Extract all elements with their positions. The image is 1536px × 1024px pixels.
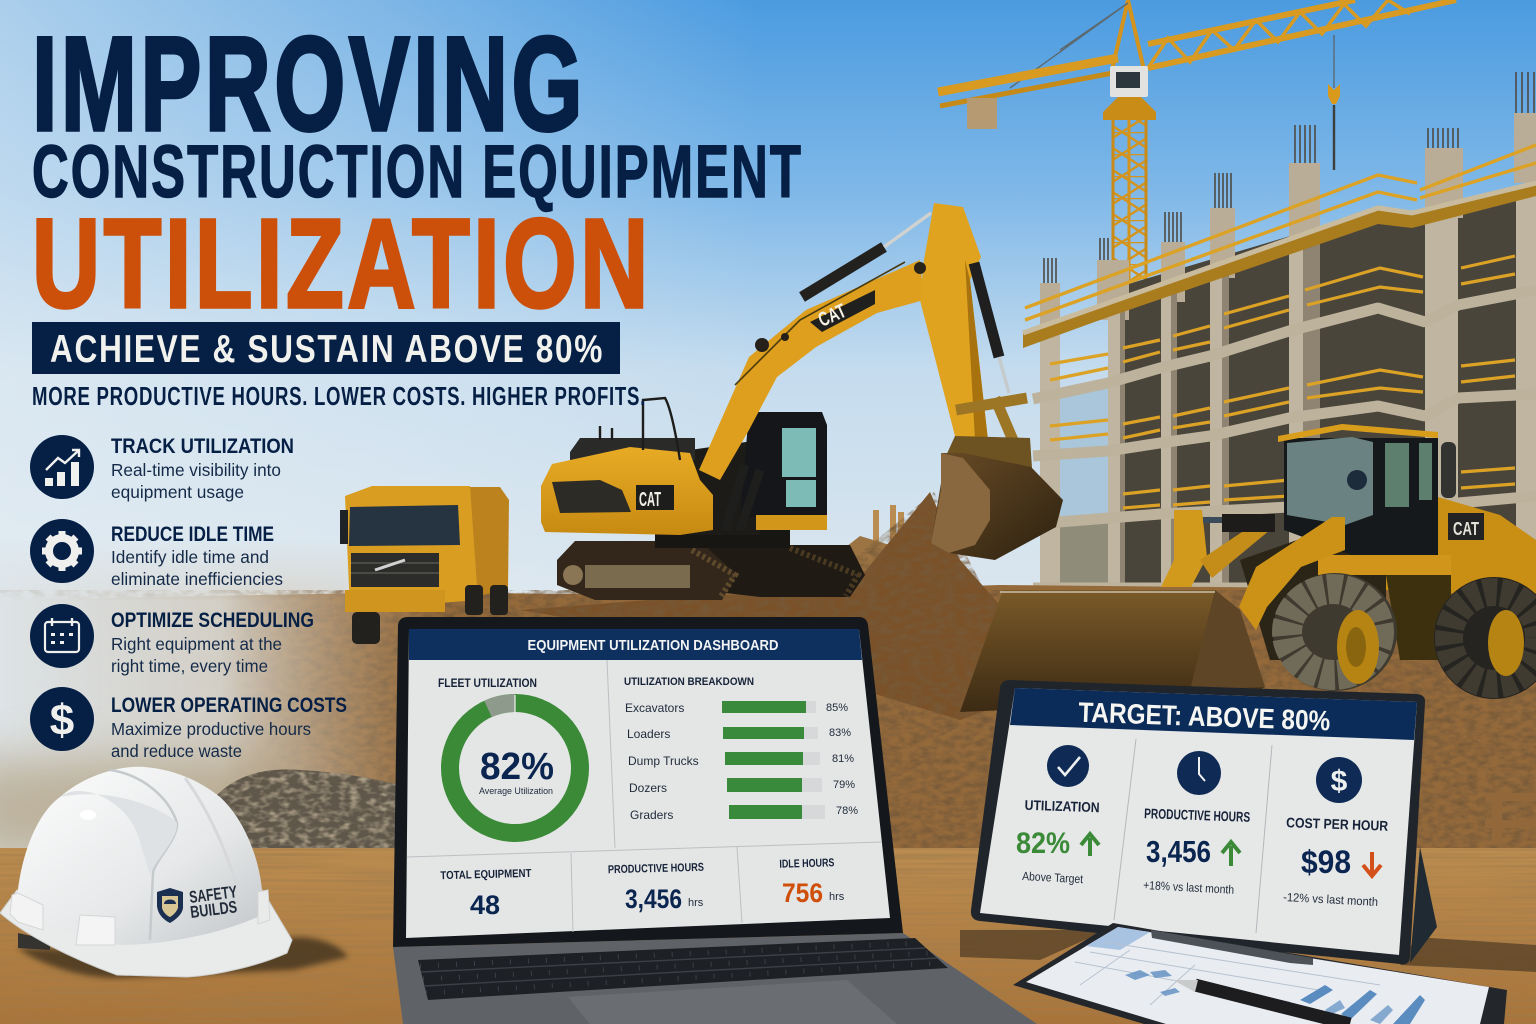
icon: dollar: $ <box>50 696 74 745</box>
wheel loader: CAT <box>1453 519 1479 539</box>
stat: idle hours: 756 <box>782 878 823 908</box>
metric: cost per hour: -12% vs last month <box>1283 890 1378 909</box>
benefit: lower operating costs: LOWER OPERATING COSTS <box>111 694 347 717</box>
tablet stand <box>1410 847 1437 963</box>
bar chart: utilization breakdown: 81% <box>832 753 854 765</box>
loader front wheel <box>1273 573 1397 691</box>
pen <box>1173 980 1350 1024</box>
icon: dollar: $ <box>1331 765 1348 798</box>
loader cab <box>1284 438 1438 560</box>
arrow: up <box>1222 842 1240 866</box>
excavator <box>541 203 1063 600</box>
tablet header: TARGET: ABOVE 80% <box>1078 697 1331 736</box>
title <box>32 10 803 334</box>
laptop screen <box>406 629 890 938</box>
wheel loader <box>960 424 1536 712</box>
report chart <box>1125 970 1425 1024</box>
bar chart: utilization breakdown: Dump Trucks <box>628 754 699 768</box>
stat: productive hours: PRODUCTIVE HOURS <box>608 862 704 876</box>
bar chart: utilization breakdown: Dozers <box>629 781 667 795</box>
dashboard header <box>409 629 862 660</box>
banner: achieve and sustain <box>32 322 620 374</box>
excavator stick <box>920 203 988 440</box>
benefit: lower operating costs: Maximize productive hours <box>111 719 311 739</box>
icon: bar chart <box>30 435 94 499</box>
metric: productive hours: PRODUCTIVE HOURS <box>1144 805 1250 825</box>
stat: productive hours <box>608 862 704 914</box>
hard hat brim <box>0 890 292 977</box>
loader chassis <box>1240 525 1386 660</box>
icon: check <box>1047 745 1089 787</box>
excavator tracks <box>557 541 865 600</box>
title line: construction equipment: CONSTRUCTION EQUIPMENT <box>32 130 803 213</box>
icon: gear <box>30 519 94 583</box>
dashboard header: EQUIPMENT UTILIZATION DASHBOARD <box>528 637 779 654</box>
sky background <box>0 0 1536 640</box>
metric: productive hours: 3,456 <box>1146 834 1211 869</box>
excavator bucket <box>931 453 1063 560</box>
top slab formwork <box>1023 145 1536 348</box>
icon: calendar <box>30 604 94 668</box>
excavator: CAT <box>639 489 661 511</box>
metric: cost per hour <box>1283 757 1388 909</box>
arrow: down <box>1363 852 1381 876</box>
wooden table <box>0 848 1536 1024</box>
hard hat logo: SAFETY <box>188 882 239 907</box>
excavator cab <box>740 412 827 517</box>
laptop base and keyboard <box>393 933 1037 1024</box>
loader bucket <box>960 590 1265 712</box>
benefit: optimize scheduling <box>30 604 314 676</box>
benefit: reduce idle time: eliminate inefficiencies <box>111 569 283 589</box>
excavator slew base <box>655 530 790 548</box>
icon: clock <box>1177 751 1221 795</box>
excavator counterweight and engine <box>570 438 695 460</box>
table shadows <box>17 930 1536 978</box>
metric: cost per hour: COST PER HOUR <box>1286 814 1388 834</box>
hard hat logo: BUILDS <box>189 897 238 922</box>
tower crane <box>938 0 1456 303</box>
benefit: reduce idle time: Identify idle time and <box>111 547 269 567</box>
donut chart: fleet utilization: 82% <box>480 746 554 788</box>
loader rear wheel <box>1434 577 1536 699</box>
stat: total equipment <box>440 868 532 920</box>
tablet screen <box>980 688 1417 955</box>
bar chart: utilization breakdown: 78% <box>836 805 858 817</box>
donut chart: fleet utilization: Average Utilization <box>479 786 553 797</box>
rebar <box>1044 72 1534 283</box>
metric: productive hours: +18% vs last month <box>1143 878 1234 897</box>
pallet <box>1485 793 1536 845</box>
metric: utilization <box>1016 745 1100 886</box>
distant site structures <box>873 505 904 545</box>
benefit: lower operating costs: and reduce waste <box>111 741 242 761</box>
tablet <box>971 680 1437 964</box>
benefit: track utilization <box>30 435 294 502</box>
benefit: optimize scheduling: Right equipment at the <box>111 634 282 654</box>
stat: productive hours: 3,456 <box>625 884 682 914</box>
bar chart: utilization breakdown: Excavators <box>625 701 684 715</box>
banner: achieve and sustain: ACHIEVE & SUSTAIN ABOVE 80% <box>50 328 604 371</box>
benefit: track utilization: equipment usage <box>111 482 244 502</box>
benefit: optimize scheduling: OPTIMIZE SCHEDULING <box>111 609 314 632</box>
benefit: track utilization: TRACK UTILIZATION <box>111 435 294 458</box>
donut chart: fleet utilization: FLEET UTILIZATION <box>438 678 537 690</box>
arrow: up <box>1081 834 1099 856</box>
stat: idle hours: hrs <box>829 891 845 903</box>
bar chart: utilization breakdown: 85% <box>826 702 848 714</box>
hard hat logo <box>157 882 239 923</box>
benefit: lower operating costs <box>30 687 347 761</box>
benefit: reduce idle time: REDUCE IDLE TIME <box>111 523 274 546</box>
dump truck <box>340 486 509 644</box>
metric: utilization: UTILIZATION <box>1024 797 1100 815</box>
laptop <box>393 617 1037 1024</box>
metric: utilization: 82% <box>1016 827 1070 860</box>
laptop lid <box>393 617 903 947</box>
stat: idle hours: IDLE HOURS <box>779 857 835 871</box>
metric: productive hours <box>1143 751 1250 897</box>
loader body <box>1386 497 1536 593</box>
concrete building under construction <box>1023 72 1536 590</box>
metric: utilization: Above Target <box>1022 869 1084 886</box>
metric: cost per hour: $98 <box>1301 844 1351 880</box>
donut chart: fleet utilization <box>438 678 580 833</box>
benefit: optimize scheduling: right time, every time <box>111 656 268 676</box>
stat: productive hours: hrs <box>688 897 704 909</box>
yellow guard rails <box>1050 256 1515 508</box>
benefit: reduce idle time <box>30 519 283 589</box>
excavator boom <box>699 260 924 480</box>
bar chart: utilization breakdown: Graders <box>630 808 673 822</box>
building interior <box>1108 185 1536 590</box>
stat: total equipment: 48 <box>470 890 500 920</box>
icon: dollar <box>30 687 94 751</box>
bar chart: utilization breakdown: UTILIZATION BREAKDOWN <box>624 676 754 688</box>
benefit: track utilization: Real-time visibility into <box>111 460 281 480</box>
tablet header <box>1010 688 1417 740</box>
loader arm <box>1239 517 1345 630</box>
tagline: MORE PRODUCTIVE HOURS. LOWER COSTS. HIGHER PROFITS. <box>32 381 646 411</box>
title line: improving: IMPROVING <box>32 10 586 159</box>
upper column stubs <box>1040 113 1536 333</box>
bar chart: utilization breakdown: 79% <box>833 779 855 791</box>
hard hat <box>0 767 292 977</box>
bar chart: utilization breakdown: 83% <box>829 727 851 739</box>
stat: idle hours <box>779 857 845 908</box>
hard hat dome <box>17 767 262 945</box>
title line: utilization: UTILIZATION <box>32 193 652 334</box>
stat: total equipment: TOTAL EQUIPMENT <box>440 868 532 882</box>
dirt ground <box>0 490 1536 860</box>
excavator: CAT <box>815 300 850 332</box>
bar chart: utilization breakdown: Loaders <box>627 727 670 741</box>
lower columns <box>1040 185 1536 590</box>
clipboard with report <box>1013 923 1507 1024</box>
floor slabs <box>1033 290 1536 588</box>
icon: dollar <box>1316 757 1362 803</box>
bar chart: utilization breakdown <box>624 676 858 822</box>
clipboard clip <box>1151 930 1313 965</box>
